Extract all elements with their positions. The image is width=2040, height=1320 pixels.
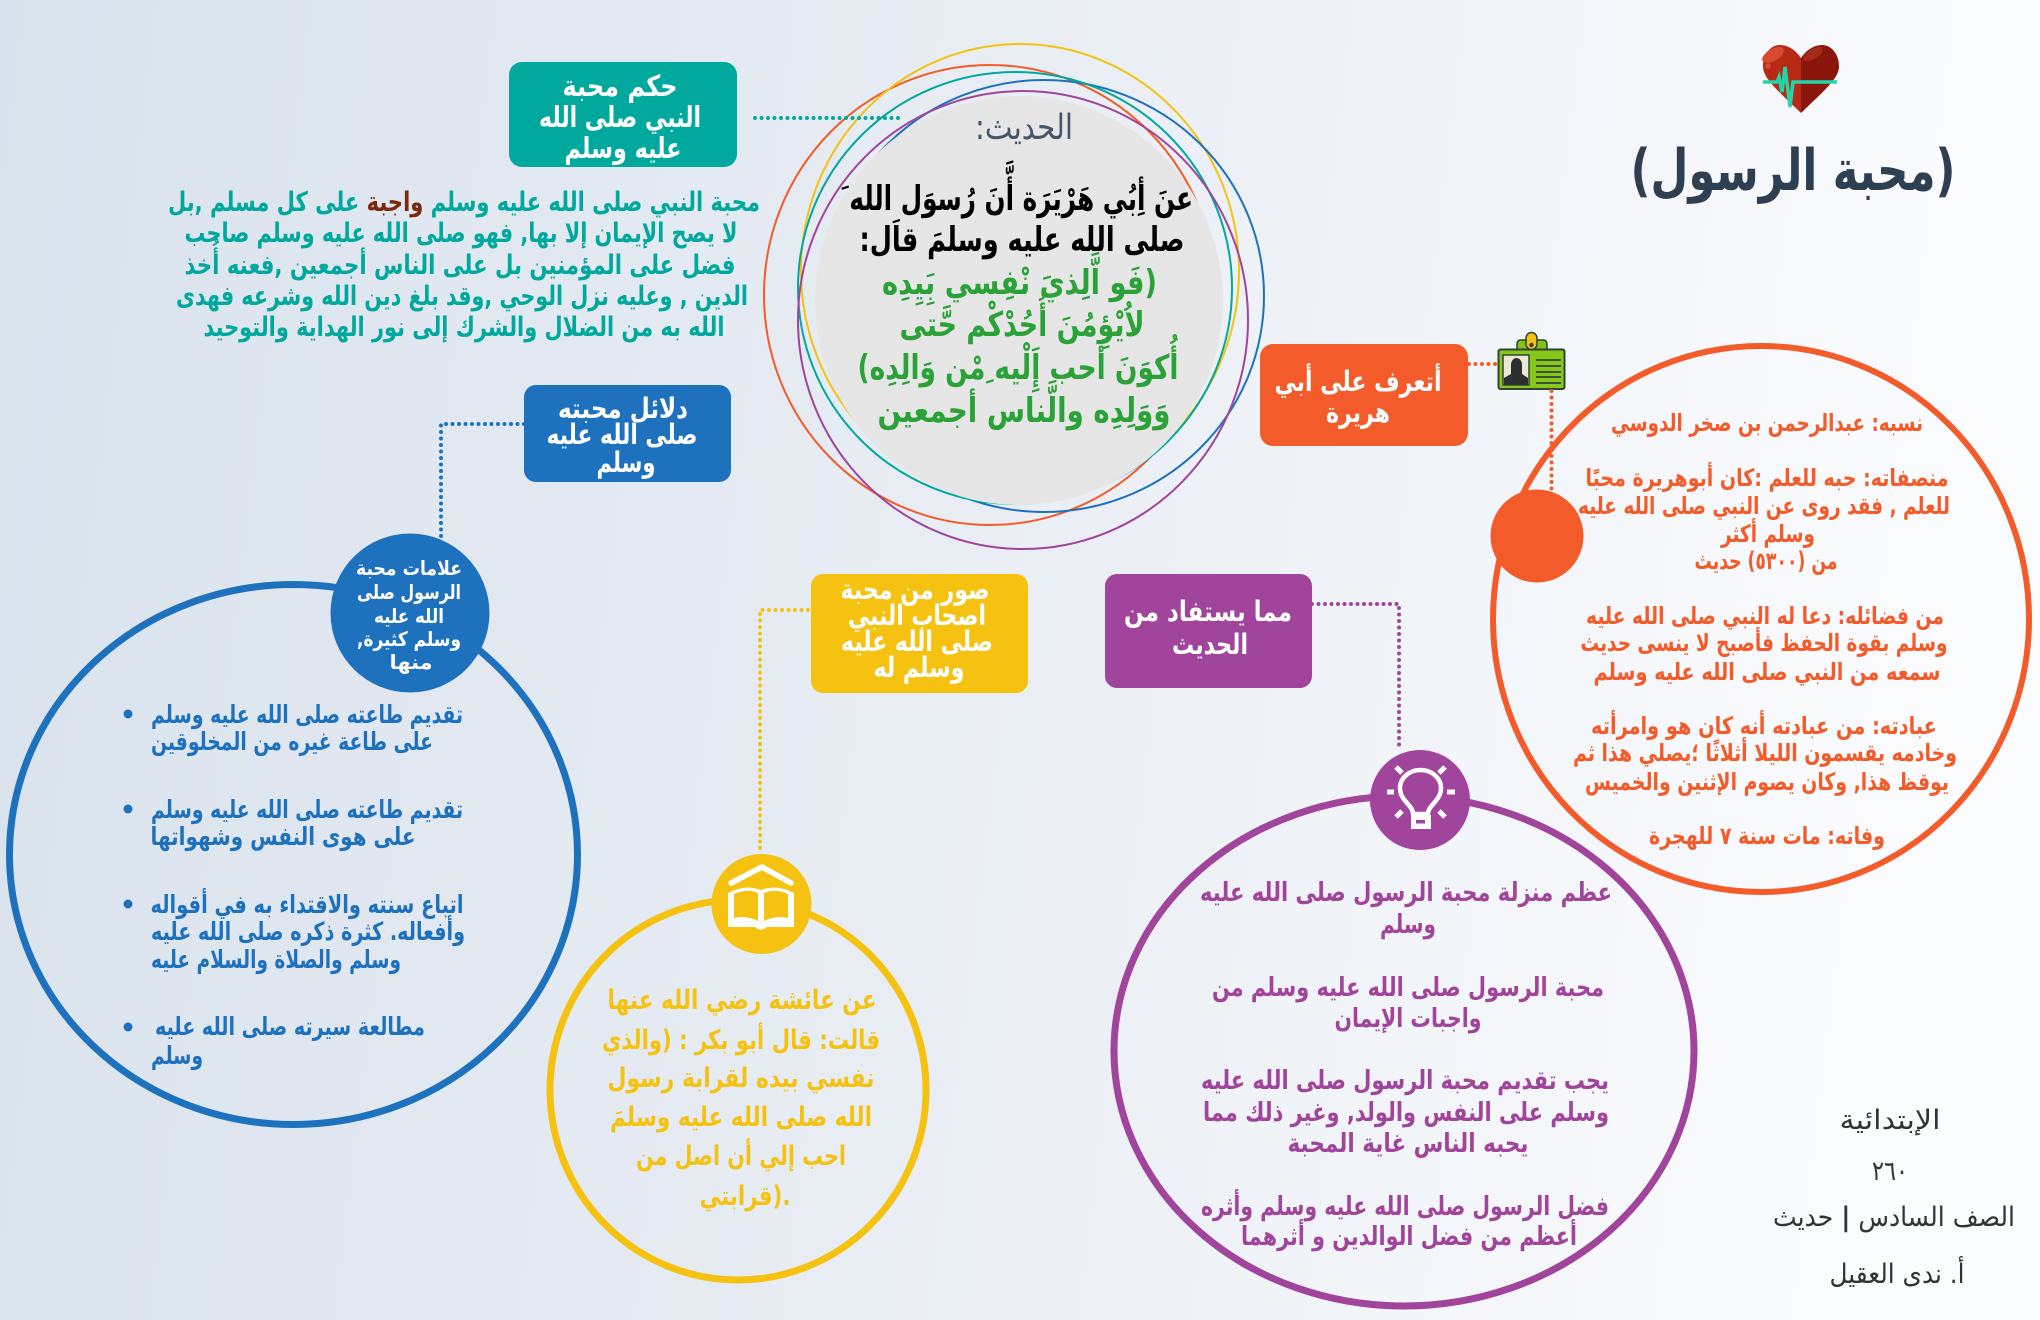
icon: light bulb: [1387, 767, 1455, 829]
panel: ruling box: حكم محبة: [562, 69, 678, 103]
text block: Aisha narration: الله صلى الله عليه وسلمَ: [610, 1102, 872, 1133]
hadith text: وَوَلِدِه والَّناس أجمعين: [878, 381, 1170, 431]
list: signs of love: وأفعاله. كثرة ذكره صلى الله عليه: [151, 915, 465, 947]
list: signs of love: تقديم طاعته صلى الله عليه وسلم: [151, 700, 463, 730]
hadith text: (فَو اَّلِذيَ نْفِسي بَِيِدِه: [882, 253, 1157, 306]
panel: benefits box: مما يستفاد من: [1124, 595, 1292, 628]
text block: class credits: أ. ندى العقيل: [1830, 1255, 1964, 1290]
panel: companions box: صور من محبة: [840, 573, 990, 606]
text block: biography: وسلم أكثر: [1720, 518, 1815, 548]
panel: companions box: وسلم له: [874, 651, 964, 684]
text block: class credits: الصف السادس | حديث: [1773, 1202, 2015, 1233]
panel: ruling box: عليه وسلم: [564, 131, 682, 165]
list: signs of love: مطالعة سيرته صلى الله عليه: [155, 1012, 425, 1042]
text block: benefits list: وسلم: [1380, 910, 1436, 940]
text block: Aisha narration: قرابتي).: [700, 1181, 790, 1212]
text block: benefits list: أعظم من فضل الوالدين و أثرهما: [1241, 1219, 1577, 1252]
text block: biography: يوقظ هذا, وكان يصوم الإثنين والخميس: [1585, 768, 1949, 796]
list: signs of love: على طاعة غيره من المخلوقين: [151, 727, 433, 757]
text block: ruling paragraph: محبة النبي صلى الله عليه وسلم واجبة على كل مسلم ,بل: [168, 187, 760, 218]
hadith text: صلى الله عليه وسلمَ قاَل:: [860, 219, 1184, 260]
panel: benefits circle: [1114, 750, 1694, 1306]
text block: benefits list: يحبه الناس غاية المحبة: [1288, 1129, 1528, 1159]
hadith heading: الحديث:: [975, 108, 1073, 148]
text block: class credits: [1773, 1105, 2015, 1290]
list: signs of love: وسلم والصلاة والسلام عليه: [151, 945, 401, 975]
hadith text: لاُيْؤِمُنَ أُحُدْكْم حَّتى: [900, 291, 1144, 350]
text block: benefits list: عظم منزلة محبة الرسول صلى الله عليه: [1200, 878, 1612, 908]
panel: companions box: اصحاب النبي: [848, 599, 986, 632]
text block: benefits list: وسلم على النفس والولد, وغير ذلك مما: [1203, 1098, 1609, 1128]
panel: hadith circle: [764, 44, 1264, 549]
panel: signs of love circle: [10, 534, 578, 1124]
text block: Aisha narration: احب إلي أن اصل من: [636, 1138, 846, 1172]
text block: benefits list: واجبات الإيمان: [1334, 1004, 1482, 1034]
panel: ruling box: [509, 62, 737, 167]
text block: class credits: الإبتدائية: [1840, 1105, 1940, 1136]
panel: evidence box: [524, 385, 731, 482]
text block: benefits list: محبة الرسول صلى الله عليه وسلم من: [1212, 973, 1604, 1003]
text block: Aisha narration: نفسي بيده لقرابة رسول: [608, 1063, 874, 1094]
panel: about Abu Hurairah box: هريرة: [1326, 396, 1390, 429]
list: signs of love: تقديم طاعته صلى الله عليه وسلم: [151, 795, 463, 825]
list: signs of love: وسلم: [151, 1041, 203, 1071]
text block: biography: من فضائله: دعا له النبي صلى الله عليه: [1586, 602, 1944, 630]
panel: biography circle: [1490, 346, 2029, 892]
panel: companions box: [811, 573, 1028, 693]
text block: ruling paragraph: الله به من الضلال والشرك إلى نور الهداية والتوحيد: [204, 312, 724, 343]
panel: ruling box: النبي صلى الله: [539, 100, 701, 134]
text block: Aisha narration: قالت: قال أبو بكر : (والذي: [602, 1022, 880, 1056]
badge: signs heading: الرسول صلى: [357, 580, 461, 604]
icon: open book: [728, 867, 794, 930]
text block: biography: عبادته: من عبادته أنه كان هو وامرأته: [1591, 710, 1937, 740]
badge: signs heading: منها: [390, 650, 432, 674]
text block: ruling paragraph: الدين , وعليه نزل الوحي ,وقد بلغ دين الله وشرعه فهدى: [176, 281, 748, 312]
icon: ID card: [1498, 332, 1564, 389]
text block: biography: وفاته: مات سنة ٧ للهجرة: [1649, 822, 1885, 850]
badge: signs heading: الله عليه: [374, 604, 444, 628]
hadith text: أُكوَنَ أَحب إَِلْيه ِمْن وَالِدِه): [858, 334, 1178, 393]
badge: signs heading: علامات محبة: [356, 556, 462, 580]
text block: biography: منصفاته: حبه للعلم :كان أبوهريرة محبًا: [1586, 462, 1948, 492]
panel: benefits box: [1105, 574, 1312, 688]
text block: biography: [1573, 409, 1957, 850]
text block: class credits: ٢٦٠: [1872, 1156, 1908, 1187]
badge: signs heading: وسلم كثيرة,: [357, 627, 461, 651]
panel: about Abu Hurairah box: أتعرف على أبي: [1274, 363, 1442, 398]
list: signs of love: اتباع سنته والاقتداء به في أقواله: [150, 888, 464, 920]
hadith text: عنَ أِبُي هَرْيَرَة أَّنَ رُسوَل الله َ: [841, 161, 1193, 219]
text block: benefits list: يجب تقديم محبة الرسول صلى الله عليه: [1201, 1066, 1609, 1096]
text block: biography: سمعه من النبي صلى الله عليه وسلم: [1594, 658, 1940, 686]
list: signs of love: على هوى النفس وشهواتها: [150, 822, 416, 852]
panel: benefits box: الحديث: [1172, 628, 1248, 661]
text block: benefits list: [1200, 878, 1612, 1252]
text block: ruling paragraph: لا يصح الإيمان إلا بها, فهو صلى الله عليه وسلم صاحب: [184, 218, 738, 249]
panel: evidence box: صلى الله عليه: [546, 418, 698, 451]
text block: biography: من (٥٣٠٠) حديث: [1694, 547, 1838, 575]
list: signs of love: [124, 700, 465, 1071]
panel: about Abu Hurairah box: [1260, 344, 1468, 446]
text block: ruling paragraph: [168, 187, 760, 343]
badge: signs heading: [330, 534, 490, 692]
text block: ruling paragraph: فضل على المؤمنين بل على الناس أجمعين ,فعنه أُخذ: [184, 238, 736, 281]
text block: benefits list: فضل الرسول صلى الله عليه وسلم وأثره: [1201, 1189, 1609, 1222]
text block: biography: نسبه: عبدالرحمن بن صخر الدوسي: [1611, 409, 1923, 437]
text block: Aisha narration: [602, 985, 880, 1212]
hadith text: [841, 161, 1193, 431]
panel: companions box: صلى الله عليه: [841, 625, 993, 658]
panel: evidence box: وسلم: [596, 446, 656, 479]
panel: evidence box: دلائل محبته: [558, 392, 688, 425]
text block: Aisha narration: عن عائشة رضي الله عنها: [608, 985, 876, 1016]
icon: heart with pulse: [1760, 44, 1839, 113]
panel: companions circle: [550, 854, 926, 1280]
